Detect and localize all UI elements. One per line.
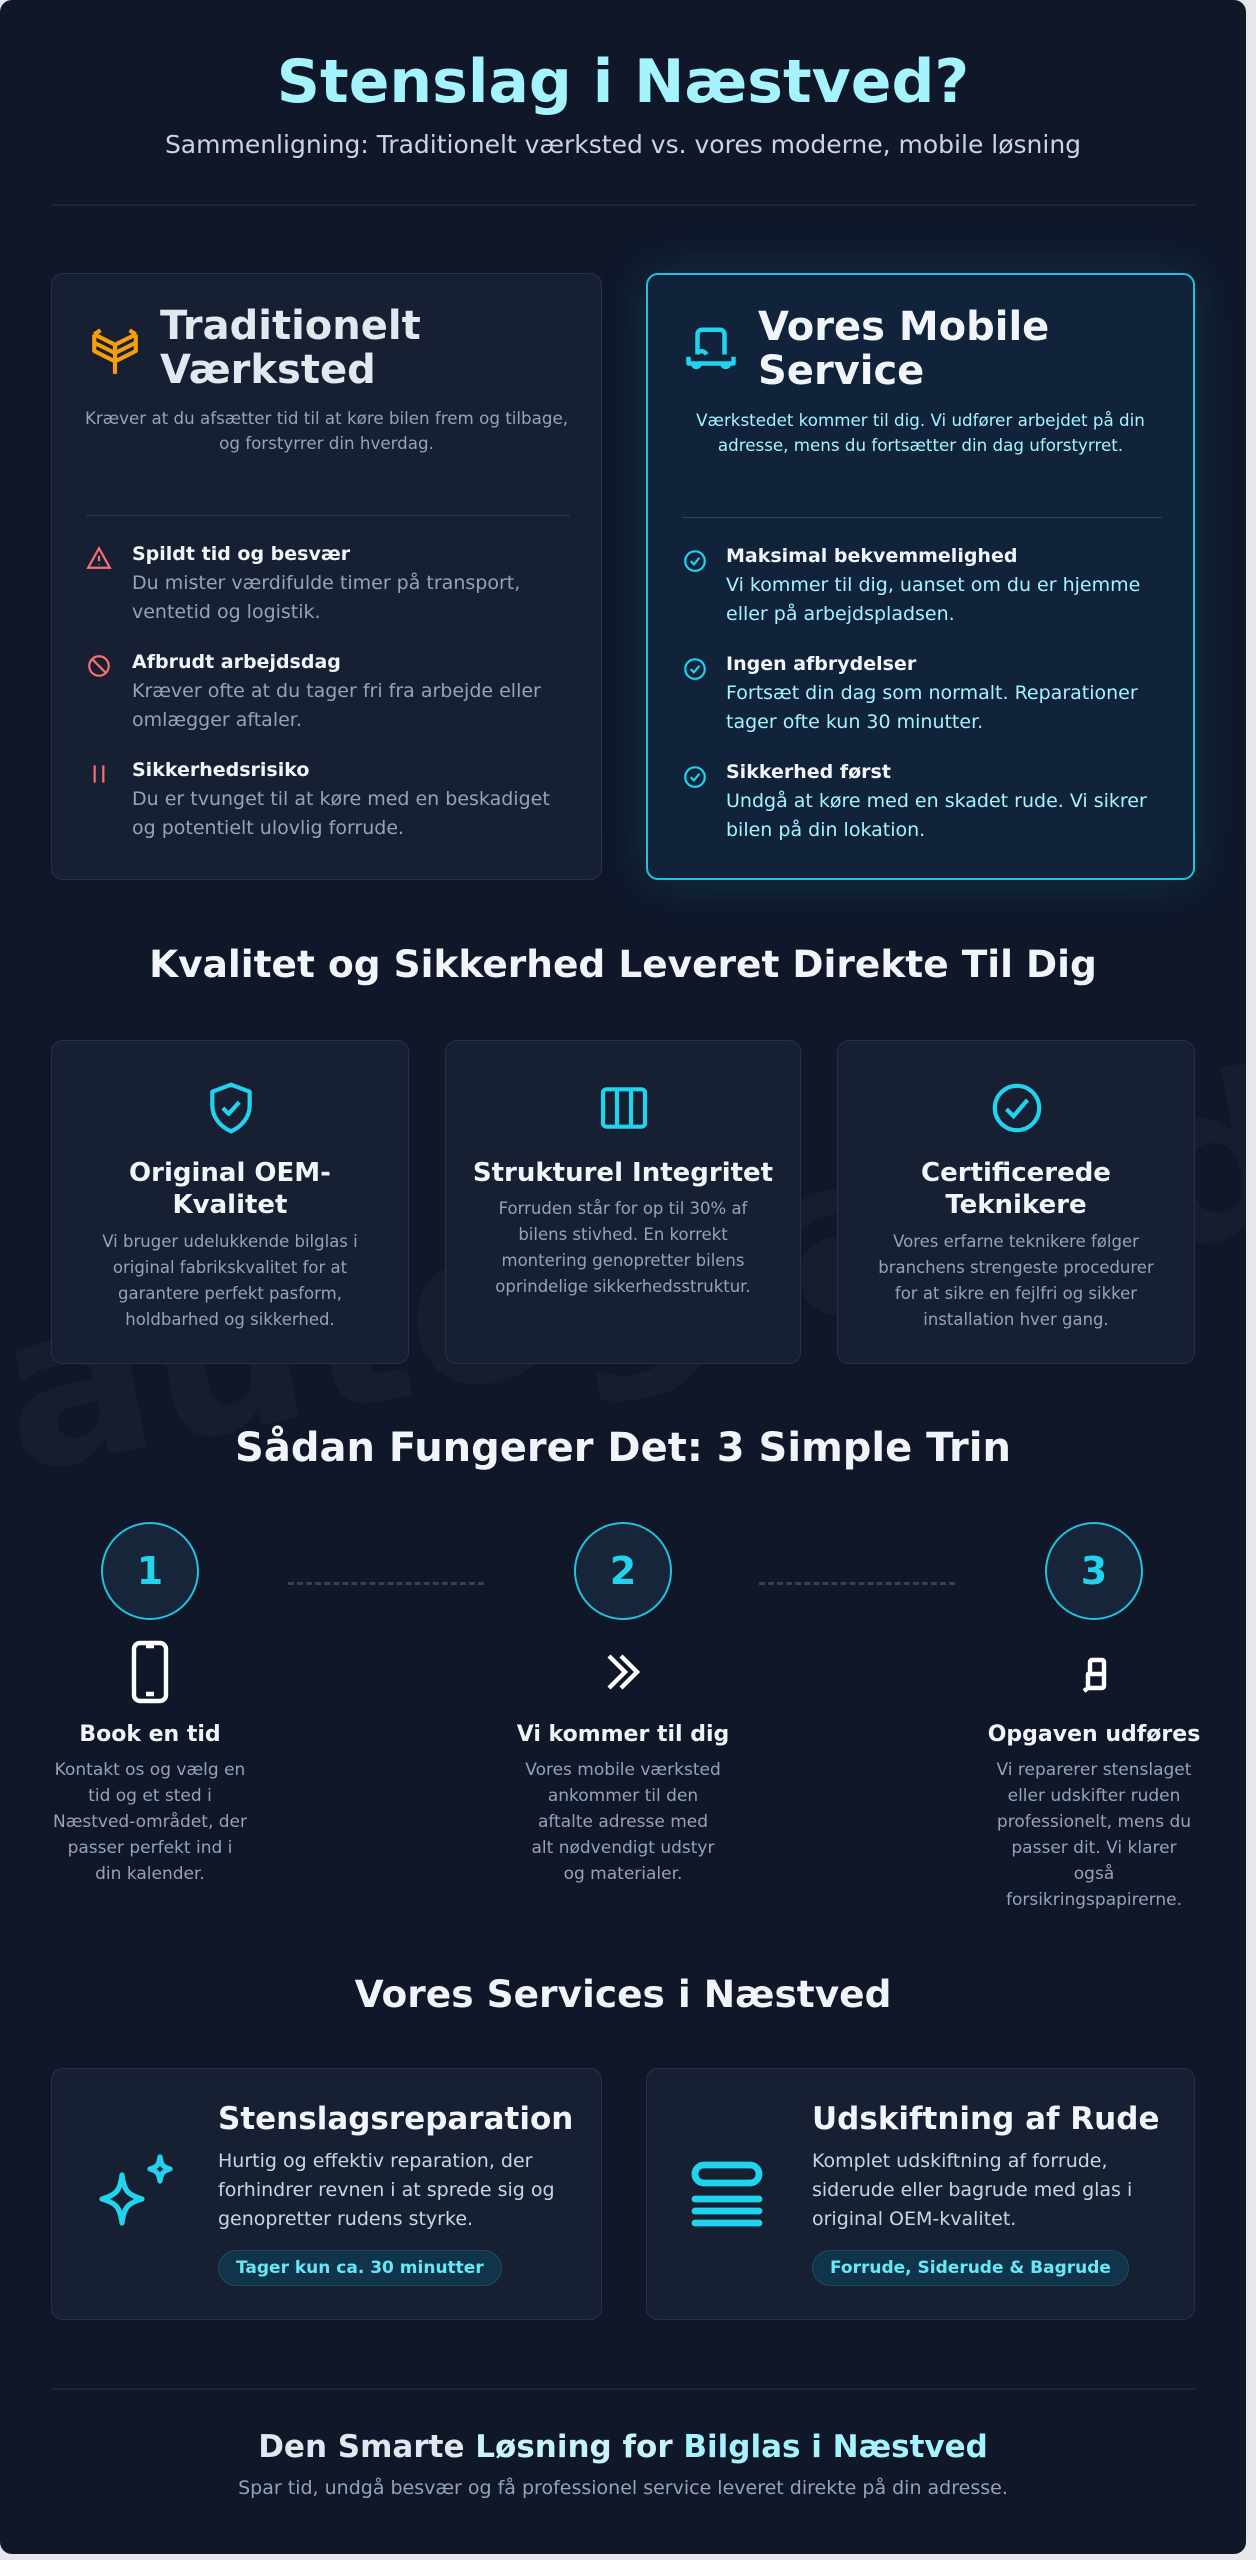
icon: check circle: [992, 1084, 1042, 1132]
arrow: dashed connector 1: [288, 1582, 484, 1585]
description: Værkstedet kommer til dig. Vi udfører arbejdet på din adresse, mens du fortsætter din dag uforstyrret.: [696, 410, 1145, 455]
card: teknikere: Vores erfarne teknikere følger branchens strengeste procedurer for at sikre en fejlfri og sikker installation hver gang.: [878, 1232, 1154, 1329]
step 3: [988, 1658, 1200, 1910]
panel: traditionelt værksted: Afbrudt arbejdsdag: [132, 651, 341, 673]
step circles: [101, 1522, 199, 1620]
card: OEM: Kvalitet: [173, 1190, 287, 1220]
item: afbrudt: [88, 651, 541, 731]
card: teknikere: Certificerede: [921, 1158, 1111, 1188]
heading: Vores Mobile: [758, 304, 1049, 350]
text: 3: [1081, 1549, 1107, 1593]
card: teknikere: [837, 1040, 1195, 1364]
footer subtitle: Spar tid, undgå besvær og få professionel service leveret direkte på din adresse.: [238, 2477, 1008, 2499]
badge: Tager kun ca. 30 minutter: [236, 2258, 484, 2278]
item: ingen afbrydelser: [684, 653, 1138, 733]
card: integritet: Forruden står for op til 30% af bilens stivhed. En korrekt montering genopretter bilens oprindelige sikkerhedsstruktur.: [495, 1199, 751, 1296]
heading: Værksted: [160, 347, 376, 393]
card: OEM: [51, 1040, 409, 1364]
panel: mobile service: [646, 273, 1195, 880]
card: udskiftning: [646, 2068, 1195, 2320]
step 1: [53, 1640, 247, 1884]
panel: mobile service: Undgå at køre med en skadet rude. Vi sikrer bilen på din lokation.: [726, 790, 1147, 841]
panel: mobile service: Vi kommer til dig, uanset om du er hjemme eller på arbejdspladsen.: [726, 574, 1140, 625]
heading: services: Vores Services i Næstved: [355, 1972, 891, 2016]
text: 2: [610, 1549, 636, 1593]
step 1: Kontakt os og vælg en tid og et sted i Næstved-området, der passer perfekt ind i din kalender.: [53, 1760, 247, 1884]
panel: mobile service: Sikkerhed først: [726, 761, 891, 783]
title: Stenslag i Næstved?: [277, 47, 969, 117]
badge: [812, 2250, 1129, 2286]
card: integritet: Strukturel Integritet: [473, 1158, 773, 1188]
icon: phone: [132, 1640, 168, 1704]
icon: sparkles: [99, 2154, 173, 2226]
description: Hurtig og effektiv reparation, der forhindrer revnen i at sprede sig og genopretter rudens styrke.: [218, 2150, 555, 2230]
panel: mobile service: Ingen afbrydelser: [726, 653, 916, 675]
badge: Forrude, Siderude & Bagrude: [830, 2258, 1111, 2278]
panel: traditionelt værksted: Kræver ofte at du tager fri fra arbejde eller omlægger aftaler.: [132, 680, 541, 731]
subtitle: Sammenligning: Traditionelt værksted vs. vores moderne, mobile løsning: [165, 130, 1081, 159]
description: Komplet udskiftning af forrude, siderude eller bagrude med glas i original OEM-kvalitet.: [812, 2150, 1132, 2230]
footer title: Den Smarte Løsning for Bilglas i Næstved: [258, 2429, 988, 2465]
item: sikkerhed: [684, 761, 1147, 841]
item: spildt tid: [86, 543, 520, 623]
step 3: Opgaven udføres: [988, 1722, 1200, 1747]
icon: columns: [600, 1087, 648, 1129]
card: stenslagsreparation: [51, 2068, 602, 2320]
icon: workshop: [92, 328, 138, 374]
step 2: [516, 1654, 729, 1884]
step 2: Vi kommer til dig: [517, 1722, 729, 1747]
panel: traditionelt værksted: Du er tvunget til at køre med en beskadiget og potentielt ulovlig forrude.: [132, 788, 550, 839]
card: OEM: Original OEM-: [129, 1158, 331, 1188]
item: risiko: [94, 759, 550, 839]
panel: mobile service: Maksimal bekvemmelighed: [726, 545, 1017, 567]
panel: traditionelt værksted: Du mister værdifulde timer på transport, ventetid og logistik.: [132, 572, 520, 623]
description: Kræver at du afsætter tid til at køre bilen frem og tilbage, og forstyrrer din hverdag.: [85, 408, 568, 453]
step circles: 1: [137, 1549, 163, 1593]
title: Udskiftning af Rude: [812, 2101, 1159, 2137]
heading: Traditionelt: [160, 303, 421, 349]
panel: traditionelt værksted: [51, 273, 602, 880]
icon: van: [686, 328, 736, 370]
item: bekvemmelighed: [684, 545, 1140, 625]
card: teknikere: Teknikere: [945, 1190, 1087, 1220]
panel: mobile service: Fortsæt din dag som normalt. Reparationer tager ofte kun 30 minutter.: [726, 682, 1138, 733]
icon: tool: [1082, 1658, 1106, 1693]
panel: traditionelt værksted: Spildt tid og besvær: [132, 543, 350, 565]
heading: sådan fungerer det: Sådan Fungerer Det: 3 Simple Trin: [235, 1425, 1011, 1471]
icon: chevrons: [608, 1654, 640, 1690]
card: OEM: Vi bruger udelukkende bilglas i original fabrikskvalitet for at garantere perfekt pasform, holdbarhed og sikkerhed.: [102, 1232, 358, 1329]
heading: Service: [758, 348, 924, 394]
icon: shield: [210, 1082, 252, 1134]
step 1: Book en tid: [79, 1722, 221, 1747]
step 2: Vores mobile værksted ankommer til den aftalte adresse med alt nødvendigt udstyr og materialer.: [525, 1760, 721, 1884]
badge: [218, 2250, 502, 2286]
heading: kvalitet: Kvalitet og Sikkerhed Leveret Direkte Til Dig: [149, 942, 1097, 986]
heading: [758, 304, 1049, 394]
title: Stenslagsreparation: [218, 2101, 573, 2137]
card: integritet: [445, 1040, 801, 1364]
step 3: Vi reparerer stenslaget eller udskifter ruden professionelt, mens du passer dit. Vi klarer også forsikringspapirerne.: [997, 1760, 1191, 1910]
heading: [160, 303, 421, 393]
arrow: dashed connector 2: [759, 1582, 955, 1585]
icon: windows stack: [692, 2162, 762, 2226]
panel: traditionelt værksted: Sikkerhedsrisiko: [132, 759, 309, 781]
